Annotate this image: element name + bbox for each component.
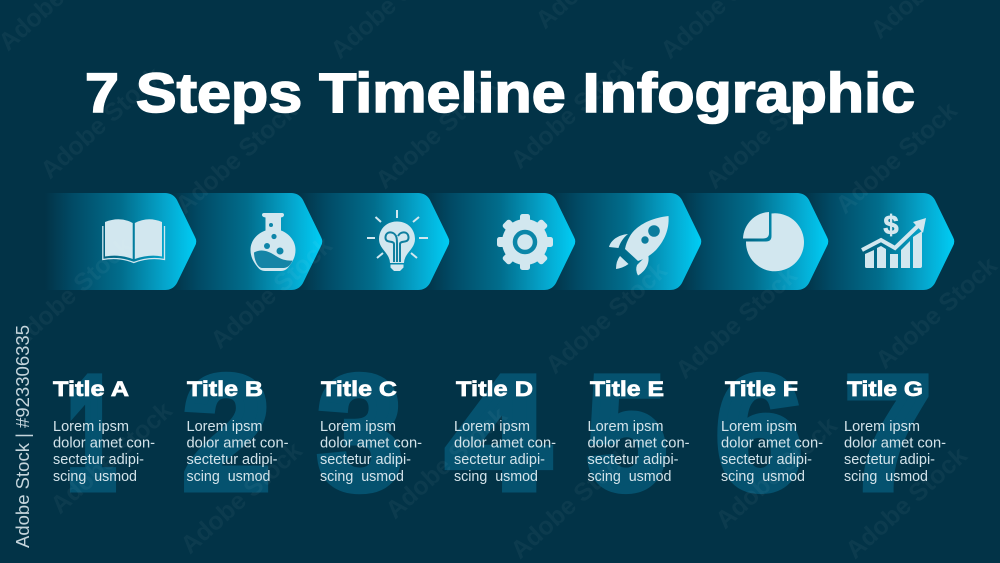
step D text: Lorem ipsm — [454, 419, 530, 435]
step G text: sectetur adipi- — [844, 452, 935, 468]
stock watermark pattern: Adobe Stock — [35, 61, 168, 184]
step E text: Lorem ipsm — [588, 419, 664, 435]
step D text: dolor amet con- — [454, 436, 556, 452]
step C text: Title C — [321, 377, 397, 401]
step B text: scing usmod — [186, 469, 270, 485]
step E text — [588, 377, 690, 485]
icon: open book — [103, 219, 164, 262]
step G text: Title G — [847, 377, 923, 401]
step B text — [186, 377, 289, 485]
step E text: dolor amet con- — [588, 436, 690, 452]
stock watermark pattern: Adobe Stock — [5, 231, 138, 354]
stock watermark pattern: Adobe Stock — [670, 261, 803, 384]
large step numbers — [67, 343, 931, 522]
step A text: dolor amet con- — [53, 436, 155, 452]
step B text: sectetur adipi- — [186, 452, 278, 468]
step F text — [721, 377, 823, 485]
title: 7 Steps Timeline Infographic — [85, 61, 915, 124]
step E text: scing usmod — [588, 469, 672, 485]
step A text: Lorem ipsm — [53, 419, 129, 435]
stock watermark pattern: Adobe Stock — [380, 401, 513, 524]
step D text: sectetur adipi- — [454, 452, 545, 468]
chevron 3 — [299, 193, 449, 290]
icon: growth chart: $ — [883, 210, 899, 240]
number 1: 1 — [67, 343, 116, 522]
step A text: scing usmod — [53, 469, 137, 485]
icon: flask — [250, 213, 296, 271]
stock watermark pattern: Adobe Stock — [830, 96, 963, 219]
stock watermark pattern: Adobe Stock — [205, 231, 338, 354]
step B text: dolor amet con- — [186, 436, 289, 452]
step A text: Title A — [53, 377, 129, 401]
step C text: sectetur adipi- — [320, 452, 411, 468]
icon: rocket — [609, 216, 669, 276]
step A text: sectetur adipi- — [53, 452, 144, 468]
icon: light bulb — [367, 210, 428, 271]
stock watermark pattern: Adobe Stock — [175, 436, 308, 559]
step C text — [320, 377, 422, 485]
step G text: scing usmod — [844, 469, 928, 485]
step E text: sectetur adipi- — [588, 452, 679, 468]
stock watermark pattern: Adobe Stock — [505, 51, 638, 174]
step D text — [454, 377, 556, 485]
step B text: Title B — [187, 377, 263, 401]
step F text: scing usmod — [721, 469, 805, 485]
icon: pie chart — [743, 212, 804, 271]
stock watermark pattern: Adobe Stock — [540, 256, 673, 379]
step A text — [53, 377, 155, 485]
chevron 6 — [678, 193, 828, 290]
stock watermark pattern: Adobe Stock — [870, 251, 1000, 374]
step B text: Lorem ipsm — [186, 419, 262, 435]
number 6: 6 — [716, 343, 802, 522]
chevron 1 — [45, 193, 196, 290]
chevron 4 — [425, 193, 575, 290]
stock watermark pattern: Adobe Stock — [710, 411, 843, 534]
step F text: dolor amet con- — [721, 436, 823, 452]
step E text: Title E — [590, 377, 664, 401]
chevron band — [45, 193, 954, 290]
step D text: Title D — [456, 377, 533, 401]
step F text: Lorem ipsm — [721, 419, 797, 435]
step D text: scing usmod — [454, 469, 538, 485]
number 5: 5 — [587, 343, 666, 522]
step C text: dolor amet con- — [320, 436, 422, 452]
stock watermark pattern: Adobe Stock — [45, 396, 178, 519]
stock watermark pattern: Adobe Stock — [840, 441, 973, 563]
step F text: Title F — [725, 377, 798, 401]
chevron 5 — [551, 193, 701, 290]
stock watermark pattern: Adobe Stock — [505, 441, 638, 563]
stock watermark pattern: Adobe Stock — [370, 71, 503, 194]
step F text: sectetur adipi- — [721, 452, 812, 468]
step C text: scing usmod — [320, 469, 404, 485]
number 4: 4 — [447, 343, 549, 522]
stock watermark pattern: Adobe Stock — [700, 71, 833, 194]
stock id sidebar: Adobe Stock | #923306335 — [13, 325, 33, 548]
step G text — [844, 377, 946, 485]
step G text: Lorem ipsm — [844, 419, 920, 435]
step G text: dolor amet con- — [844, 436, 946, 452]
chevron 2 — [172, 193, 322, 290]
icon: growth chart — [862, 210, 926, 268]
chevron 7 — [804, 193, 954, 290]
stock watermark pattern: Adobe Stock — [170, 96, 303, 219]
number 7: 7 — [845, 343, 931, 522]
icon: gear — [497, 214, 553, 270]
number 3: 3 — [318, 343, 402, 522]
number 2: 2 — [183, 343, 270, 522]
step C text: Lorem ipsm — [320, 419, 396, 435]
